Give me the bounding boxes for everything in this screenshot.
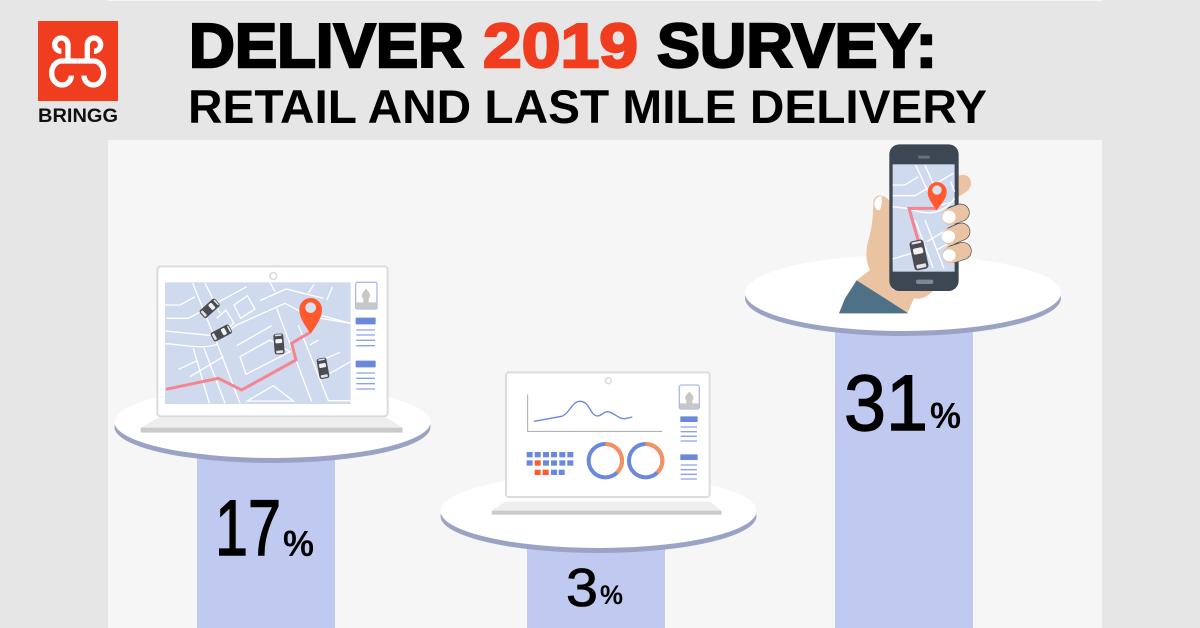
column: 3%: [527, 540, 665, 628]
subtitle: Retail and last mile delivery: RETAIL AND LAST MILE DELIVERY: [188, 81, 987, 134]
column: 17%: %: [283, 523, 314, 564]
icon: laptop with delivery map: [141, 266, 403, 433]
column: 3%: %: [600, 580, 623, 610]
column: 17%: [197, 450, 335, 628]
pedestal: centre: [440, 474, 756, 553]
logo: Bringg: BRINGG: [38, 105, 118, 127]
pedestal: right: [745, 255, 1061, 336]
pedestal: left: [114, 386, 430, 463]
column: 31%: [835, 320, 973, 628]
title: Deliver 2019 Survey: [189, 12, 937, 81]
title: Deliver 2019 Survey: DELIVER: [189, 12, 464, 81]
panel: survey background: [108, 140, 1102, 628]
column: 31%: %: [930, 395, 961, 436]
column: 31%: 31: [844, 358, 928, 447]
title: Deliver 2019 Survey: 2019: [483, 12, 638, 81]
icon: hand holding phone with map: [839, 144, 971, 313]
column: 3%: 3: [566, 558, 598, 618]
column: 17%: 17: [215, 483, 281, 572]
title: Deliver 2019 Survey: SURVEY:: [657, 12, 937, 81]
icon: laptop with dashboard: [492, 372, 722, 515]
logo: Bringg: [38, 21, 118, 127]
